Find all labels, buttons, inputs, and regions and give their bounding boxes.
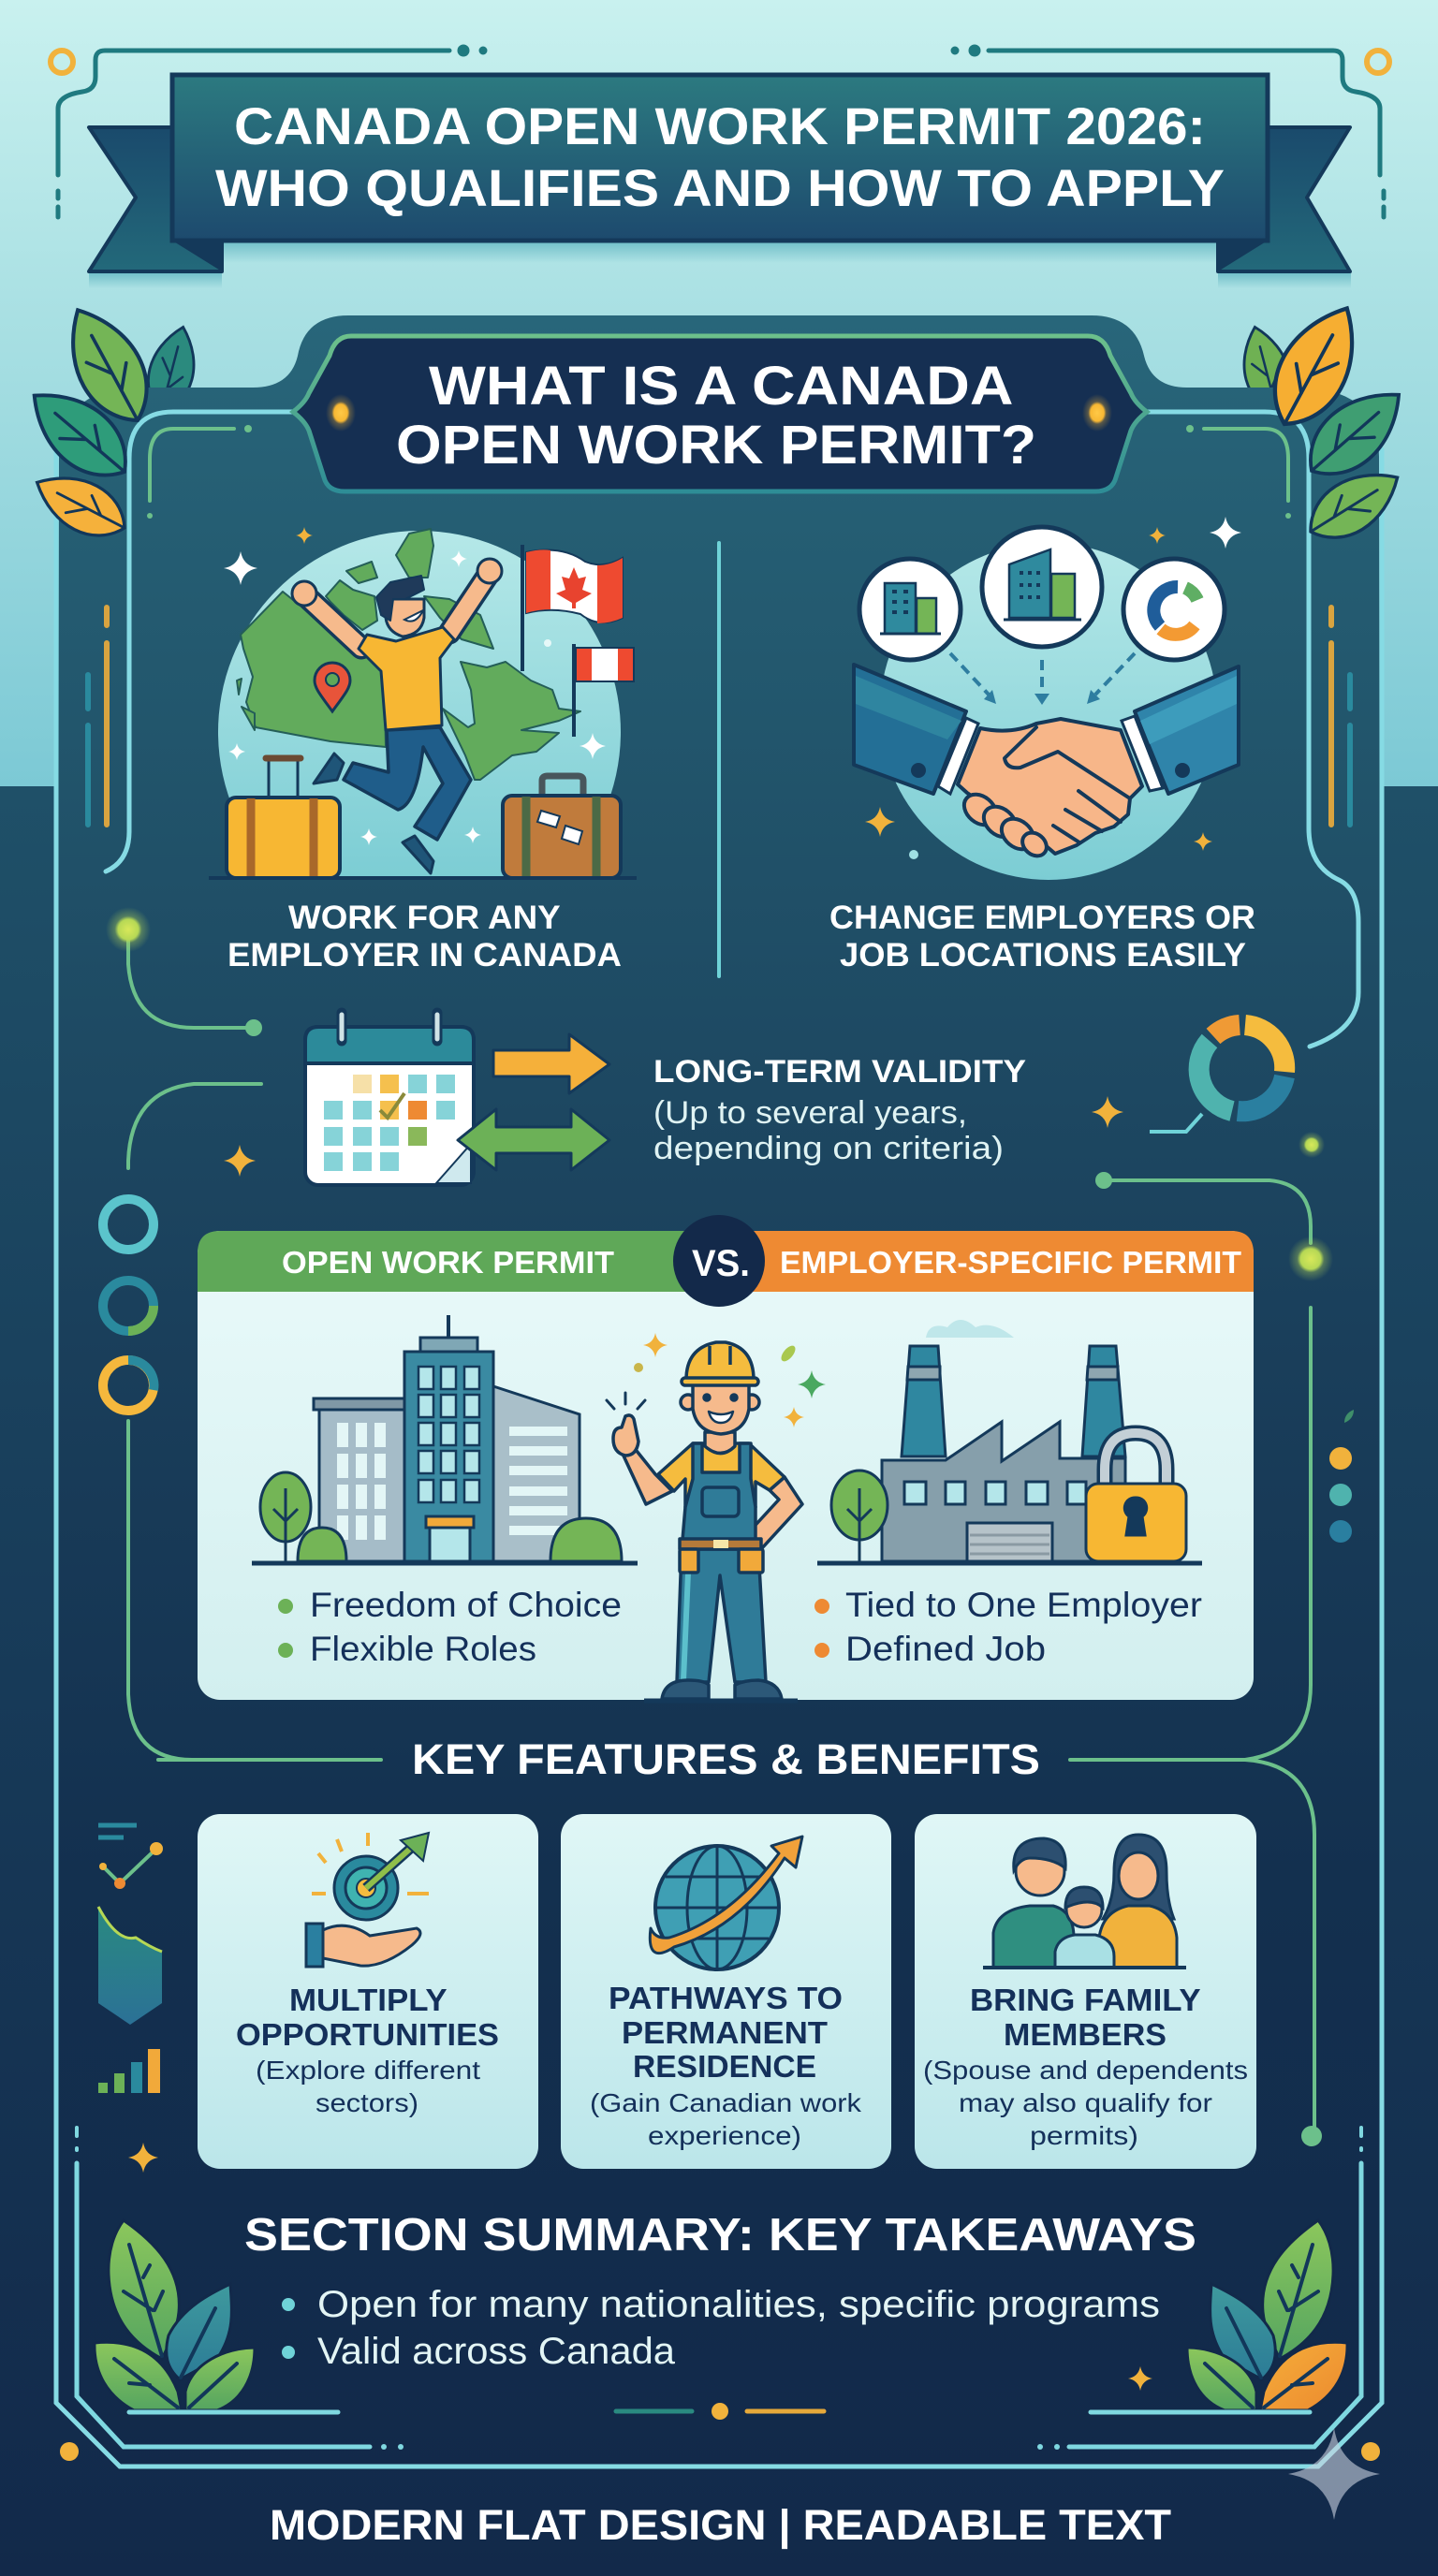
bullets left: Flexible Roles <box>310 1630 536 1668</box>
long-term validity text: (Up to several years, <box>653 1095 967 1131</box>
summary bullet list <box>282 2284 1160 2372</box>
arrow: green double <box>458 1109 609 1170</box>
left side decorative mini charts <box>98 1825 163 2173</box>
card: bring family members: may also qualify for <box>959 2088 1212 2117</box>
cuffs <box>938 718 978 794</box>
worker figure <box>613 1342 802 1701</box>
neck <box>705 1432 735 1453</box>
decorative rings left <box>103 1199 154 1411</box>
card: bring family members: permits) <box>1030 2121 1138 2150</box>
card: multiply opportunities: (Explore different <box>256 2056 480 2085</box>
summary bullet list: Open for many nationalities, specific programs <box>317 2284 1160 2325</box>
icon: donut chart <box>1150 1025 1284 1132</box>
title text: CANADA OPEN WORK PERMIT 2026: <box>234 96 1206 155</box>
overalls <box>682 1443 756 1540</box>
bullets left <box>278 1586 622 1668</box>
hard hat <box>686 1342 754 1380</box>
card text: BRING FAMILY <box>970 1983 1201 2017</box>
head <box>681 1395 696 1410</box>
vs badge: VS. <box>692 1243 750 1284</box>
title ribbon banner <box>89 75 1351 288</box>
bottom decorative lines and dot <box>129 2366 1310 2420</box>
card text: PATHWAYS TO <box>609 1981 843 2015</box>
badge right: logo <box>1123 559 1225 660</box>
long-term validity text: LONG-TERM VALIDITY <box>653 1054 1026 1090</box>
header orange <box>719 1231 1254 1292</box>
green connector lines <box>128 936 1322 2146</box>
badge left: office <box>859 559 961 660</box>
top decorative corner lines <box>51 47 1389 217</box>
factory with padlock <box>831 1320 1186 1563</box>
header green <box>198 1231 719 1292</box>
dashed arrows <box>950 653 1135 695</box>
title text: WHO QUALIFIES AND HOW TO APPLY <box>215 158 1225 217</box>
illustration: jumping worker over Canada map <box>209 527 637 878</box>
bullets right: Tied to One Employer <box>845 1586 1202 1624</box>
legs <box>677 1549 766 1682</box>
watermark sparkle <box>1288 2428 1380 2520</box>
card: bring family members: (Spouse and dependents <box>923 2056 1248 2085</box>
suitcases <box>269 759 298 799</box>
label: change employers: JOB LOCATIONS EASILY <box>840 937 1246 973</box>
icon: family <box>983 1835 1186 1968</box>
shirt <box>359 627 454 730</box>
vs badge <box>673 1215 765 1307</box>
card: bring family members <box>915 1814 1256 2169</box>
card: multiply opportunities: sectors) <box>315 2088 418 2117</box>
icon: target and hand <box>306 1833 429 1967</box>
flags <box>522 545 574 737</box>
card: pathways to permanent residence: experience) <box>648 2121 801 2150</box>
header labels: OPEN WORK PERMIT <box>282 1245 614 1280</box>
globe circle <box>218 531 621 878</box>
long-term validity text: depending on criteria) <box>653 1131 1004 1166</box>
illustration: handshake with employer badges <box>854 517 1241 880</box>
stars <box>865 517 1241 859</box>
shirt <box>658 1443 785 1507</box>
bullets right: Defined Job <box>845 1630 1046 1668</box>
pants and shoes <box>314 754 344 783</box>
ground line <box>209 876 637 880</box>
canada map <box>237 529 580 780</box>
badge middle: tower <box>982 527 1102 647</box>
vertical divider <box>717 543 721 976</box>
glowing node lights <box>106 907 1333 1281</box>
card: multiply opportunities <box>198 1814 538 2169</box>
label: work for any employer: EMPLOYER IN CANADA <box>227 937 622 973</box>
arms <box>306 574 489 648</box>
icon: calendar <box>305 1013 474 1185</box>
footer text: MODERN FLAT DESIGN | READABLE TEXT <box>270 2501 1171 2550</box>
leaves: bottom left cluster <box>95 2220 255 2410</box>
leaves: top right cluster <box>1255 293 1417 553</box>
panel frame lines <box>56 412 1382 2466</box>
leaves: bottom right cluster <box>1187 2220 1347 2410</box>
card text: PERMANENT <box>622 2015 828 2050</box>
worker sparkles <box>607 1333 826 1427</box>
sleeves <box>854 665 966 794</box>
header text: WHAT IS A CANADA <box>429 356 1012 417</box>
open permit buildings <box>260 1315 622 1563</box>
white and gold stars <box>224 527 606 845</box>
gold stars mid <box>224 1096 1123 1177</box>
header text: OPEN WORK PERMIT? <box>396 415 1036 476</box>
hands <box>958 719 1142 854</box>
bullets right <box>814 1586 1202 1668</box>
panel: comparison open vs employer-specific: EMPLOYER-SPECIFIC PERMIT <box>780 1245 1241 1280</box>
summary bullet list: Valid across Canada <box>317 2331 676 2372</box>
map pin <box>315 663 350 711</box>
heading: section summary: SECTION SUMMARY: KEY TAKEAWAYS <box>244 2210 1196 2261</box>
bullets left: Freedom of Choice <box>310 1586 622 1624</box>
section header plate <box>293 336 1147 491</box>
decorative dots right <box>1329 1410 1354 1543</box>
long-term validity text <box>653 1054 1026 1166</box>
card text: RESIDENCE <box>633 2049 816 2084</box>
leaves: top left cluster <box>15 295 165 549</box>
hip arm <box>746 1477 802 1549</box>
main panel background <box>56 315 1382 2466</box>
card text: OPPORTUNITIES <box>236 2017 499 2052</box>
card text: MULTIPLY <box>289 1983 448 2017</box>
card: pathways to permanent residence <box>561 1814 891 2169</box>
belt and pouches <box>680 1539 761 1549</box>
arrow: orange right <box>493 1034 609 1093</box>
thumb arm <box>623 1451 672 1504</box>
label: work for any employer: WORK FOR ANY <box>288 900 560 936</box>
label: change employers: CHANGE EMPLOYERS OR <box>829 900 1255 936</box>
card: pathways to permanent residence: (Gain Canadian work <box>590 2088 862 2117</box>
head <box>386 599 424 637</box>
panel: comparison open vs employer-specific <box>198 1215 1254 1701</box>
icon: globe and arrow <box>650 1837 802 1969</box>
small leaves behind panel <box>140 322 1298 417</box>
card text: MEMBERS <box>1004 2017 1167 2052</box>
heading: key features: KEY FEATURES & BENEFITS <box>412 1735 1040 1783</box>
